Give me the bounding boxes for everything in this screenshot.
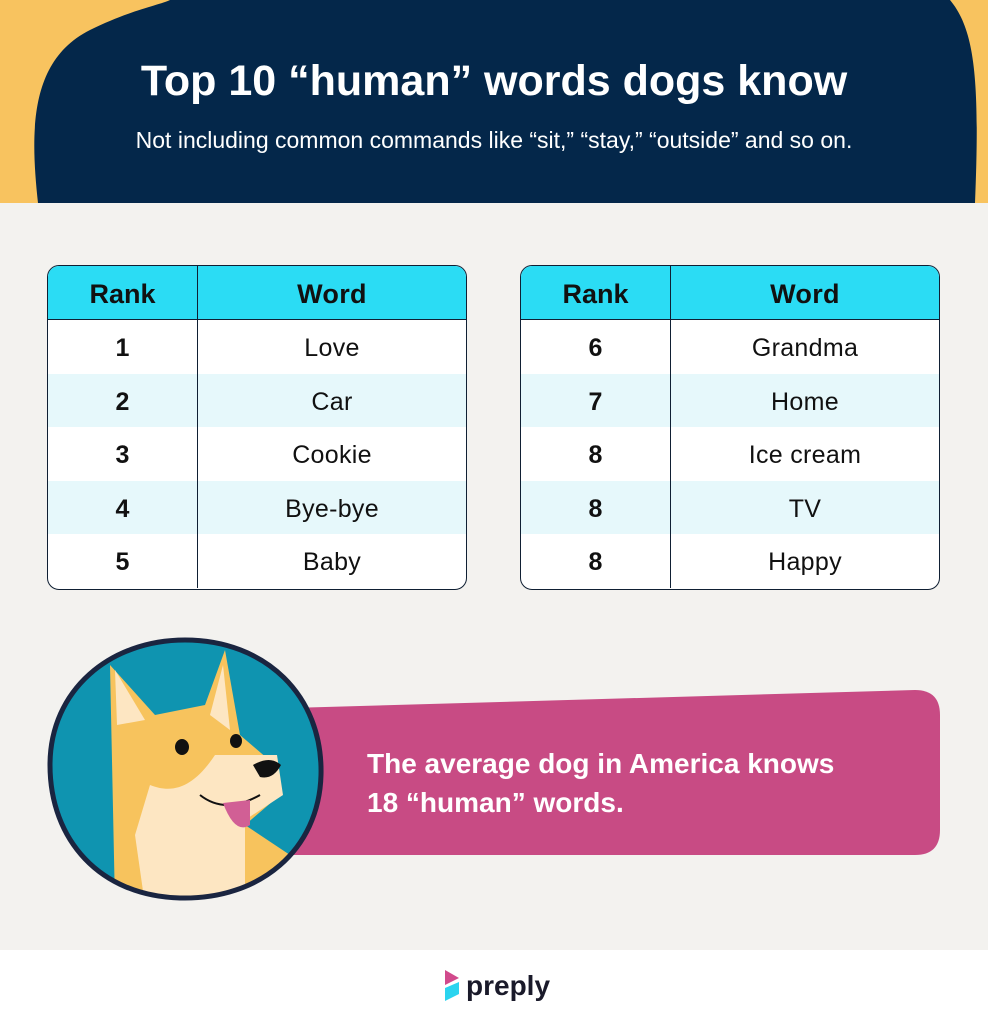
- table: ranks 1-5: 3: [116, 441, 129, 469]
- icon: corgi in circle: [48, 638, 324, 900]
- table: ranks 6-8: Home: [771, 388, 839, 416]
- table: ranks 6-8: 8: [589, 495, 602, 523]
- table: ranks 1-5: 1: [116, 334, 129, 362]
- table: ranks 6-8: Word: [770, 279, 840, 309]
- callout text: 18 “human” words.: [367, 787, 624, 818]
- table: ranks 1-5: 4: [116, 495, 129, 523]
- callout text: [367, 748, 834, 818]
- table: ranks 6-8: Grandma: [752, 334, 858, 362]
- title: Top 10 “human” words dogs know: [141, 57, 847, 105]
- table: ranks 6-8: 6: [589, 334, 602, 362]
- table: ranks 6-8: Rank: [562, 279, 629, 309]
- footer: [0, 950, 988, 1024]
- table: ranks 1-5: Love: [304, 334, 360, 362]
- table: ranks 1-5: Cookie: [292, 441, 372, 469]
- table: ranks 6-8: Ice cream: [749, 441, 861, 469]
- subtitle: Not including common commands like “sit,” “stay,” “outside” and so on.: [136, 127, 852, 153]
- header background: [0, 0, 988, 203]
- table: ranks 1-5: Car: [311, 388, 353, 416]
- table: ranks 1-5: [47, 265, 467, 590]
- table: ranks 6-8: TV: [789, 495, 821, 523]
- table: ranks 1-5: Bye-bye: [285, 495, 379, 523]
- table: ranks 6-8: 8: [589, 548, 602, 576]
- table: ranks 1-5: Baby: [303, 548, 361, 576]
- table: ranks 1-5: Word: [297, 279, 367, 309]
- callout banner: [294, 690, 940, 855]
- table: ranks 1-5: 2: [116, 388, 129, 416]
- table: ranks 1-5: 5: [116, 548, 129, 576]
- table: ranks 6-8: Happy: [768, 548, 842, 576]
- table: ranks 6-8: 7: [589, 388, 602, 416]
- callout text: The average dog in America knows: [367, 748, 834, 779]
- logo: preply: preply: [466, 970, 550, 1001]
- table: ranks 6-8: [520, 265, 940, 590]
- table: ranks 6-8: 8: [589, 441, 602, 469]
- table: ranks 1-5: Rank: [89, 279, 156, 309]
